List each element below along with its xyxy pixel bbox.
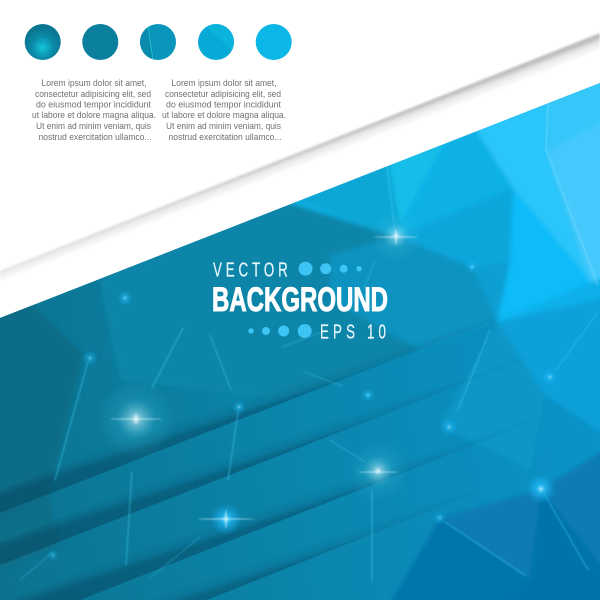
title: BACKGROUND: BACKGROUND: [212, 281, 388, 319]
circle 3: [140, 24, 176, 60]
text block: right column: consectetur adipisicing elit, sed: [165, 88, 281, 99]
text block: left column: consectetur adipisicing elit, sed: [35, 88, 151, 99]
paper shadow: [0, 33, 600, 288]
text block: right column: ut labore et dolore magna aliqua.: [162, 109, 286, 120]
circle row: [25, 24, 292, 60]
lens flares: [47, 210, 559, 561]
circle 2: [82, 24, 118, 60]
dots beside VECTOR: [298, 262, 362, 276]
fold shadows: [0, 315, 508, 600]
light streaks: [20, 103, 598, 580]
text block: left column: Lorem ipsum dolor sit amet,: [42, 77, 146, 88]
text block: left column: Ut enim ad minim veniam, quis: [36, 120, 151, 131]
title: VECTOR: VECTOR: [213, 258, 292, 281]
circle 5: [256, 24, 292, 60]
circle 4: [198, 24, 234, 60]
text block: left column: ut labore et dolore magna aliqua.: [32, 109, 156, 120]
subtitle: EPS 10: EPS 10: [320, 320, 390, 343]
text block: left column: do eiusmod tempor incididunt: [36, 98, 151, 110]
text block: right column: nostrud exercitation ullamco...: [168, 131, 282, 142]
text block: right column: Lorem ipsum dolor sit amet,: [172, 77, 276, 88]
circle 1: [25, 24, 61, 60]
text block: left column: nostrud exercitation ullamco...: [38, 131, 152, 142]
text block: right column: do eiusmod tempor incididunt: [166, 98, 281, 110]
dots beside EPS 10: [248, 324, 312, 338]
text block: right column: Ut enim ad minim veniam, quis: [166, 120, 281, 131]
